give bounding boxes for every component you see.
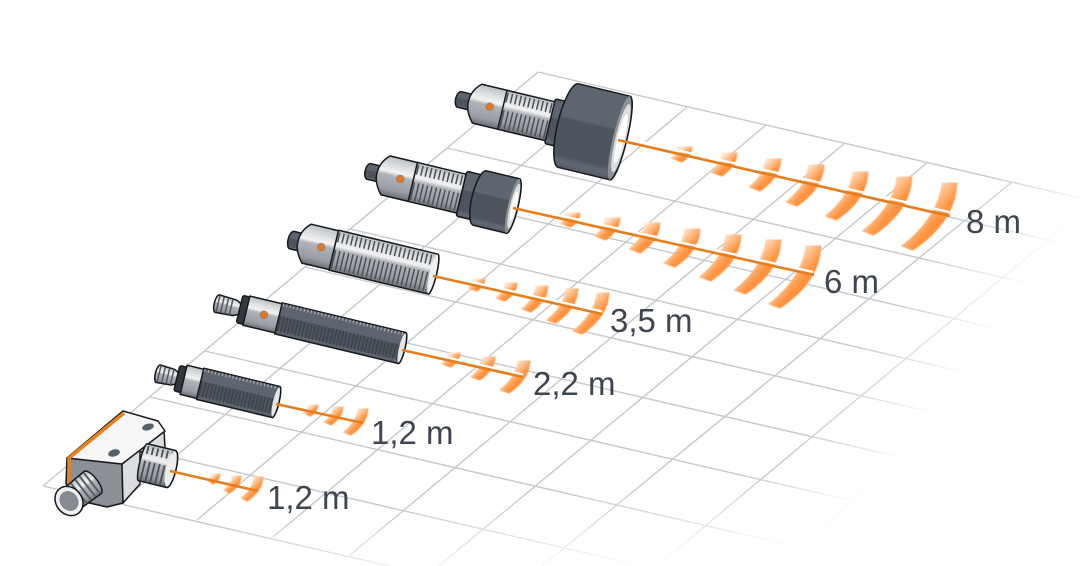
sensor: 6 m xyxy=(359,143,524,234)
lens xyxy=(425,253,441,295)
waves 6 m xyxy=(560,213,821,308)
LED xyxy=(485,102,494,111)
beam 8 m xyxy=(618,140,950,216)
label 3,5 m: 3,5 m xyxy=(610,302,693,339)
neck xyxy=(456,171,488,221)
mounting hole rear xyxy=(141,422,155,432)
block sensor: lower 1,2 m xyxy=(49,411,180,521)
cap xyxy=(548,81,637,181)
beam highlight 2,2 m xyxy=(407,348,523,374)
collar xyxy=(372,154,418,201)
label 6 m: 6 m xyxy=(824,263,879,300)
beam 6 m xyxy=(513,208,814,275)
detection field: lower 1,2 m xyxy=(170,471,263,501)
detection field: upper 1,2 m xyxy=(276,404,368,435)
detection field: 2,2 m xyxy=(402,348,530,393)
housing top face xyxy=(67,411,165,464)
sensor: upper 1,2 m xyxy=(152,357,283,418)
waves lower 1,2 m xyxy=(207,474,263,501)
beam highlight 8 m xyxy=(632,140,949,212)
label 2,2 m: 2,2 m xyxy=(533,365,616,402)
beam lower 1,2 m xyxy=(170,471,258,491)
plug xyxy=(286,230,308,252)
front plug xyxy=(49,467,106,521)
orange edge xyxy=(69,413,124,483)
detection field: 3,5 m xyxy=(433,275,609,334)
label lower 1,2 m: 1,2 m xyxy=(267,479,350,516)
label upper 1,2 m: 1,2 m xyxy=(371,414,454,451)
beam upper 1,2 m xyxy=(276,404,363,423)
lens xyxy=(502,178,524,234)
threaded body xyxy=(275,303,409,364)
threaded body xyxy=(329,230,441,295)
collar xyxy=(180,365,205,399)
threaded body xyxy=(196,368,283,418)
threaded body xyxy=(498,90,556,141)
mounting hole front xyxy=(107,448,121,458)
sensor: 3,5 m xyxy=(283,219,441,295)
waves upper 1,2 m xyxy=(304,405,368,435)
plug xyxy=(454,91,476,111)
connector xyxy=(153,364,181,387)
LED xyxy=(259,310,269,319)
LED xyxy=(317,243,326,252)
collar xyxy=(243,296,283,333)
housing left face xyxy=(66,458,123,507)
label 8 m: 8 m xyxy=(966,203,1021,240)
neck xyxy=(545,99,577,149)
cap xyxy=(466,169,524,234)
plug xyxy=(363,163,385,182)
lens xyxy=(269,386,283,418)
collar xyxy=(293,222,338,270)
ring xyxy=(236,295,251,324)
sensor: 2,2 m xyxy=(211,287,409,364)
lens xyxy=(603,95,637,181)
detection field: 6 m xyxy=(513,207,821,308)
threaded body xyxy=(408,163,466,213)
waves 8 m xyxy=(671,147,957,250)
beam 3,5 m xyxy=(433,276,602,314)
housing right face xyxy=(122,430,165,503)
connector xyxy=(212,294,243,318)
sensor: 8 m xyxy=(446,57,637,181)
waves 3,5 m xyxy=(468,279,609,334)
collar xyxy=(464,82,508,129)
side connector xyxy=(135,443,180,489)
ring xyxy=(174,366,188,393)
detection field: 8 m xyxy=(618,140,957,250)
LED xyxy=(396,174,405,184)
beam 2,2 m xyxy=(402,350,523,377)
beam highlight 6 m xyxy=(522,207,813,272)
lens xyxy=(395,332,409,364)
beam highlight 3,5 m xyxy=(440,275,602,312)
waves 2,2 m xyxy=(442,353,530,393)
